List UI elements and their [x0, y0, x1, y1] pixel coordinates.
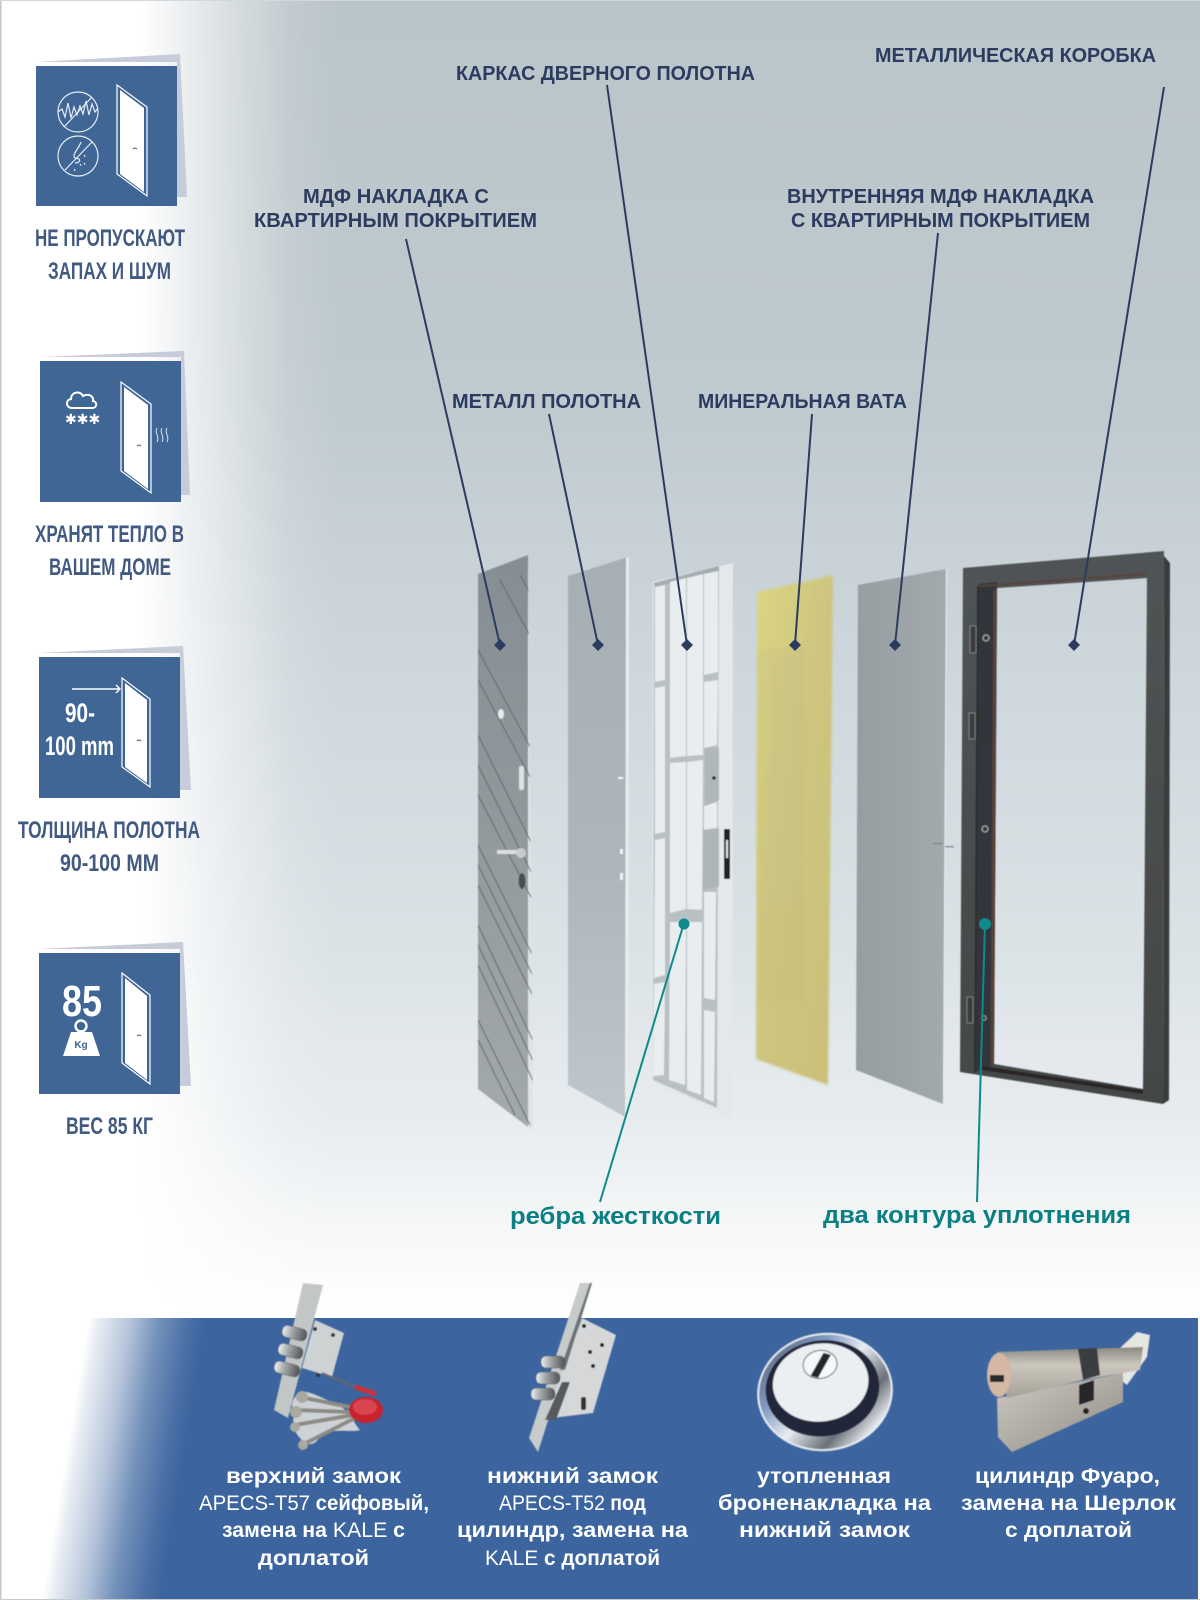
label: inner MDF overlay: ВНУТРЕННЯЯ МДФ НАКЛАДКА — [787, 186, 1094, 208]
illustration: upper lock with keys — [273, 1283, 383, 1450]
illustration: recessed armor plate — [749, 1324, 901, 1460]
label: MDF overlay — [254, 186, 537, 232]
label: door leaf frame: КАРКАС ДВЕРНОГО ПОЛОТНА — [456, 63, 755, 85]
label: leaf thickness — [18, 817, 200, 877]
callout line: metal box — [1068, 87, 1164, 651]
text: lower lock: APECS-T52 под — [499, 1492, 646, 1515]
text: armor plate: утопленная — [757, 1465, 891, 1488]
label: two sealing contours: два контура уплотнения — [823, 1202, 1131, 1229]
label: leaf thickness: 90-100 ММ — [60, 850, 159, 877]
icon: door — [117, 85, 147, 196]
thickness value: 100 mm — [45, 731, 114, 761]
label: smell and noise: НЕ ПРОПУСКАЮТ — [35, 225, 185, 252]
label: stiffening ribs: ребра жесткости — [510, 1203, 721, 1230]
frame cells — [653, 571, 718, 1102]
icon: weight — [63, 1020, 100, 1056]
text: armor plate — [718, 1465, 931, 1542]
label: weight: ВЕС 85 КГ — [66, 1113, 153, 1140]
thickness value: 90- — [65, 698, 95, 728]
label: inner MDF overlay: С КВАРТИРНЫМ ПОКРЫТИЕМ — [791, 210, 1090, 232]
panel: weight feature — [39, 942, 191, 1094]
text: upper lock: замена на KALE с — [222, 1519, 405, 1542]
panel: leaf thickness feature — [39, 646, 191, 798]
illustration: Fuaro cylinder — [987, 1332, 1150, 1452]
illustration: lower lock — [529, 1283, 616, 1452]
arrow: thickness — [72, 685, 120, 693]
panel: smell and noise feature — [36, 54, 187, 206]
icon: door — [121, 382, 151, 493]
panel: inner MDF overlay layer — [856, 569, 954, 1104]
callout line: MDF overlay — [406, 239, 506, 651]
label: mineral wool: МИНЕРАЛЬНАЯ ВАТА — [698, 391, 907, 413]
label: leaf thickness: ТОЛЩИНА ПОЛОТНА — [18, 817, 200, 844]
thickness value — [45, 698, 114, 761]
panel: metal door frame — [960, 551, 1170, 1104]
icon: no smell — [58, 136, 98, 176]
text: lower lock: KALE с доплатой — [485, 1547, 660, 1570]
icon: no noise — [58, 92, 98, 132]
callout line: inner MDF overlay — [889, 233, 938, 651]
icon: door — [122, 973, 150, 1084]
text: cylinder: замена на Шерлок — [961, 1492, 1177, 1515]
icon: snow cloud: ✱✱✱ — [65, 411, 100, 427]
text: cylinder — [961, 1465, 1177, 1542]
text: upper lock: доплатой — [258, 1547, 369, 1570]
label: keeps warmth: ВАШЕМ ДОМЕ — [49, 554, 171, 581]
text: upper lock — [199, 1465, 429, 1570]
icon: snow cloud — [65, 392, 100, 427]
label: MDF overlay: КВАРТИРНЫМ ПОКРЫТИЕМ — [254, 210, 537, 232]
label: smell and noise — [35, 225, 185, 285]
icon: heat waves — [156, 428, 168, 442]
weight value: 85 — [62, 977, 102, 1026]
label: keeps warmth — [35, 521, 184, 581]
label: smell and noise: ЗАПАХ И ШУМ — [48, 258, 171, 285]
text: lower lock — [457, 1465, 688, 1570]
callout line: mineral wool — [789, 414, 812, 651]
text: upper lock: APECS-T57 сейфовый, — [199, 1492, 429, 1515]
text: cylinder: цилиндр Фуаро, — [975, 1465, 1160, 1488]
text: lower lock: цилиндр, замена на — [457, 1519, 688, 1542]
panel: keeps warmth feature — [40, 351, 190, 502]
icon: door — [122, 678, 150, 787]
label: MDF overlay: МДФ НАКЛАДКА С — [303, 186, 489, 208]
callout line: door leaf frame — [607, 85, 693, 651]
label: keeps warmth: ХРАНЯТ ТЕПЛО В — [35, 521, 184, 548]
lock plates — [705, 748, 719, 806]
panel: mineral wool layer — [756, 575, 833, 1085]
callout line: stiffening ribs — [600, 918, 690, 1202]
callout line: two sealing contours — [977, 918, 991, 1202]
label: metal box: МЕТАЛЛИЧЕСКАЯ КОРОБКА — [875, 45, 1156, 67]
label: metal sheet: МЕТАЛЛ ПОЛОТНА — [452, 391, 641, 413]
text: armor plate: нижний замок — [739, 1519, 911, 1542]
text: upper lock: верхний замок — [226, 1465, 402, 1488]
label: inner MDF overlay — [787, 186, 1094, 232]
panel: MDF overlay layer — [478, 555, 535, 1129]
panel: metal sheet layer — [568, 557, 629, 1118]
text: armor plate: броненакладка на — [718, 1492, 931, 1515]
text: lower lock: нижний замок — [487, 1465, 659, 1488]
panel: door leaf frame with ribs — [652, 563, 733, 1120]
bottom banner — [0, 1318, 1198, 1599]
icon: weight: Kg — [74, 1040, 88, 1051]
text: cylinder: с доплатой — [1005, 1519, 1132, 1542]
callout line: metal sheet — [549, 414, 604, 651]
